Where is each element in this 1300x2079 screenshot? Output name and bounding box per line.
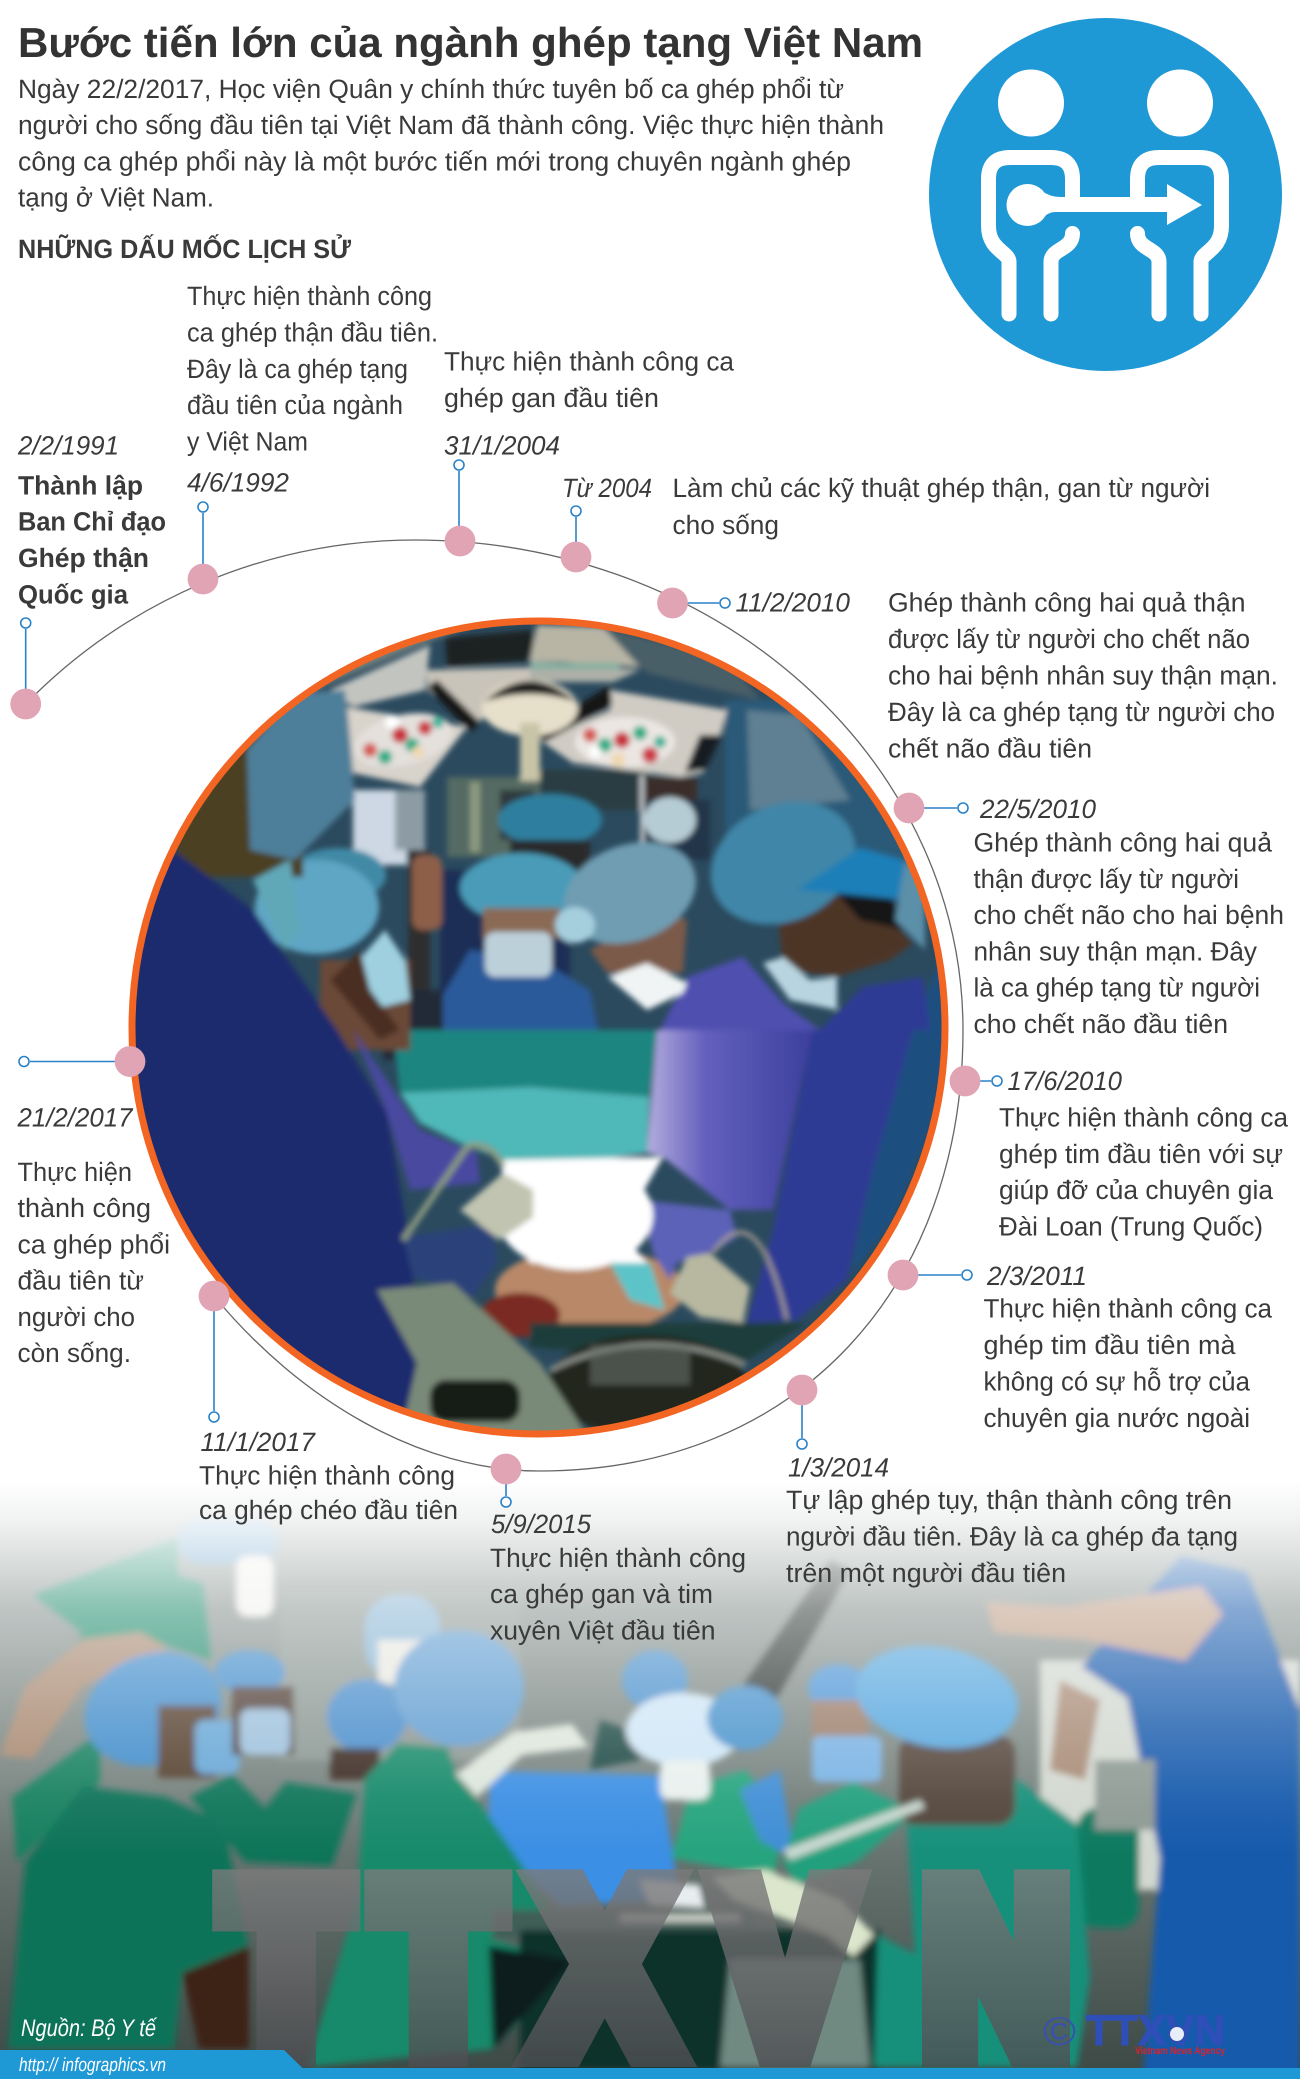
logo: TTXVN: TTXVN [1086,2007,1225,2055]
milestone: 11/2/2010: 11/2/2010 [736,588,850,618]
milestone markers [10,460,1002,1507]
milestone: 2/3/2011: 2/3/2011 [986,1261,1087,1291]
milestone: 11/2/2010: cho hai bệnh nhân suy thận mạn. [888,660,1278,690]
milestone: 21/2/2017: Thực hiện [18,1157,132,1187]
milestone: 22/5/2010 [974,794,1284,1039]
milestone: 11/2/2010: được lấy từ người cho chết não [888,624,1250,654]
milestone: from 2004: Làm chủ các kỹ thuật ghép thận, gan từ người [672,473,1210,503]
milestone: 2/2/1991: Ghép thận [18,543,149,573]
milestone: 1/3/2014: trên một người đầu tiên [786,1558,1066,1588]
milestone: 22/5/2010: cho chết não đầu tiên [974,1009,1228,1039]
milestone: 21/2/2017: đầu tiên từ [18,1266,144,1296]
milestone: from 2004: cho sống [672,510,779,540]
milestone: 17/6/2010: Đài Loan (Trung Quốc) [999,1212,1263,1242]
milestone: 11/2/2010 [736,588,1278,764]
milestone: 17/6/2010: giúp đỡ của chuyên gia [999,1175,1273,1205]
milestone: 22/5/2010: thận được lấy từ người [974,864,1239,894]
milestone: 21/2/2017 [17,1102,170,1368]
milestone: 5/9/2015 [490,1509,746,1646]
source: Nguồn: Bộ Y tế [21,2015,157,2042]
milestone: 2/2/1991: 2/2/1991 [17,430,119,460]
milestone: 31/1/2004: ghép gan đầu tiên [444,383,659,413]
milestone: 21/2/2017: 21/2/2017 [17,1102,134,1132]
milestone: 2/2/1991: Quốc gia [18,580,128,610]
milestone: 17/6/2010: Thực hiện thành công ca [999,1102,1288,1132]
timeline arc [26,540,963,1471]
milestone: 21/2/2017: còn sống. [18,1338,131,1368]
milestone: 17/6/2010: 17/6/2010 [1008,1066,1122,1096]
milestone: 2/3/2011: Thực hiện thành công ca [984,1294,1272,1324]
milestone: 2/3/2011: chuyên gia nước ngoài [984,1403,1250,1433]
intro text: tạng ở Việt Nam. [18,182,214,212]
milestone: 22/5/2010: là ca ghép tạng từ người [974,972,1260,1002]
milestone: 11/2/2010: chết não đầu tiên [888,734,1092,764]
milestone: 5/9/2015: Thực hiện thành công [490,1543,746,1573]
milestone: 5/9/2015: 5/9/2015 [491,1509,591,1539]
milestone: 11/1/2017: ca ghép chéo đầu tiên [199,1495,458,1525]
milestone: 31/1/2004: 31/1/2004 [444,430,560,460]
milestone: 5/9/2015: xuyên Việt đầu tiên [490,1616,716,1646]
milestone: 4/6/1992: y Việt Nam [187,426,308,456]
intro text [18,74,884,212]
milestone: 1/3/2014 [786,1452,1238,1588]
milestone: 2/3/2011: không có sự hỗ trợ của [984,1366,1250,1396]
milestone: from 2004 [562,473,1210,540]
milestone: 11/1/2017 [199,1427,458,1525]
section heading: NHỮNG DẤU MỐC LỊCH SỬ [18,234,351,264]
intro text: công ca ghép phổi này là một bước tiến mới trong chuyên ngành ghép [18,146,851,176]
milestone: 4/6/1992: ca ghép thận đầu tiên. [187,318,438,348]
milestone: from 2004: Từ 2004 [562,473,652,503]
icon: two people with transfer arrow [929,18,1282,371]
milestone: 2/2/1991 [17,430,166,610]
milestone: 21/2/2017: thành công [18,1193,151,1223]
milestone: 17/6/2010: ghép tim đầu tiên với sự [999,1139,1283,1169]
milestone: 22/5/2010: nhân suy thận mạn. Đây [974,936,1258,966]
milestone: 4/6/1992 [187,281,438,498]
milestone: 4/6/1992: Thực hiện thành công [187,281,432,311]
url: http:// infographics.vn [19,2055,166,2076]
milestone: 31/1/2004 [444,346,734,460]
milestone: 2/3/2011 [984,1261,1272,1433]
milestone: 2/2/1991: Thành lập [18,470,143,500]
milestone: 17/6/2010 [999,1066,1288,1242]
milestone: 21/2/2017: ca ghép phổi [18,1230,170,1260]
milestone: 1/3/2014: người đầu tiên. Đây là ca ghép đa tạng [786,1522,1238,1552]
intro text: người cho sống đầu tiên tại Việt Nam đã thành công. Việc thực hiện thành [18,110,884,140]
footer bar [0,2050,1300,2079]
milestone: 2/3/2011: ghép tim đầu tiên mà [984,1330,1236,1360]
milestone: 4/6/1992: đầu tiên của ngành [187,390,403,420]
milestone: 22/5/2010: 22/5/2010 [979,794,1096,824]
milestone: 11/1/2017: 11/1/2017 [200,1427,316,1457]
milestone: 21/2/2017: người cho [18,1302,135,1332]
milestone: 22/5/2010: cho chết não cho hai bệnh [974,900,1284,930]
milestone: 11/2/2010: Đây là ca ghép tạng từ người cho [888,697,1275,727]
milestone: 11/2/2010: Ghép thành công hai quả thận [888,588,1246,618]
logo: TTXVN: Vietnam News Agency [1135,2045,1225,2057]
milestone: 1/3/2014: Tự lập ghép tụy, thận thành công trên [786,1485,1232,1515]
background photo: transplant team in green scrubs [0,1480,1300,2079]
circular operating room photo [100,610,965,1440]
milestone: 4/6/1992: Đây là ca ghép tạng [187,354,408,384]
milestone: 2/2/1991: Ban Chỉ đạo [18,506,166,536]
milestone: 1/3/2014: 1/3/2014 [788,1452,889,1482]
milestone: 11/1/2017: Thực hiện thành công [199,1460,455,1490]
milestone: 31/1/2004: Thực hiện thành công ca [444,346,734,376]
intro text: Ngày 22/2/2017, Học viện Quân y chính thức tuyên bố ca ghép phổi từ [18,74,844,104]
milestone: 5/9/2015: ca ghép gan và tim [490,1579,713,1609]
milestone: 4/6/1992: 4/6/1992 [187,468,289,498]
milestone: 22/5/2010: Ghép thành công hai quả [974,828,1272,858]
logo: TTXVN: © [1043,2010,1076,2054]
title: Bước tiến lớn của ngành ghép tạng Việt Nam [18,19,923,66]
